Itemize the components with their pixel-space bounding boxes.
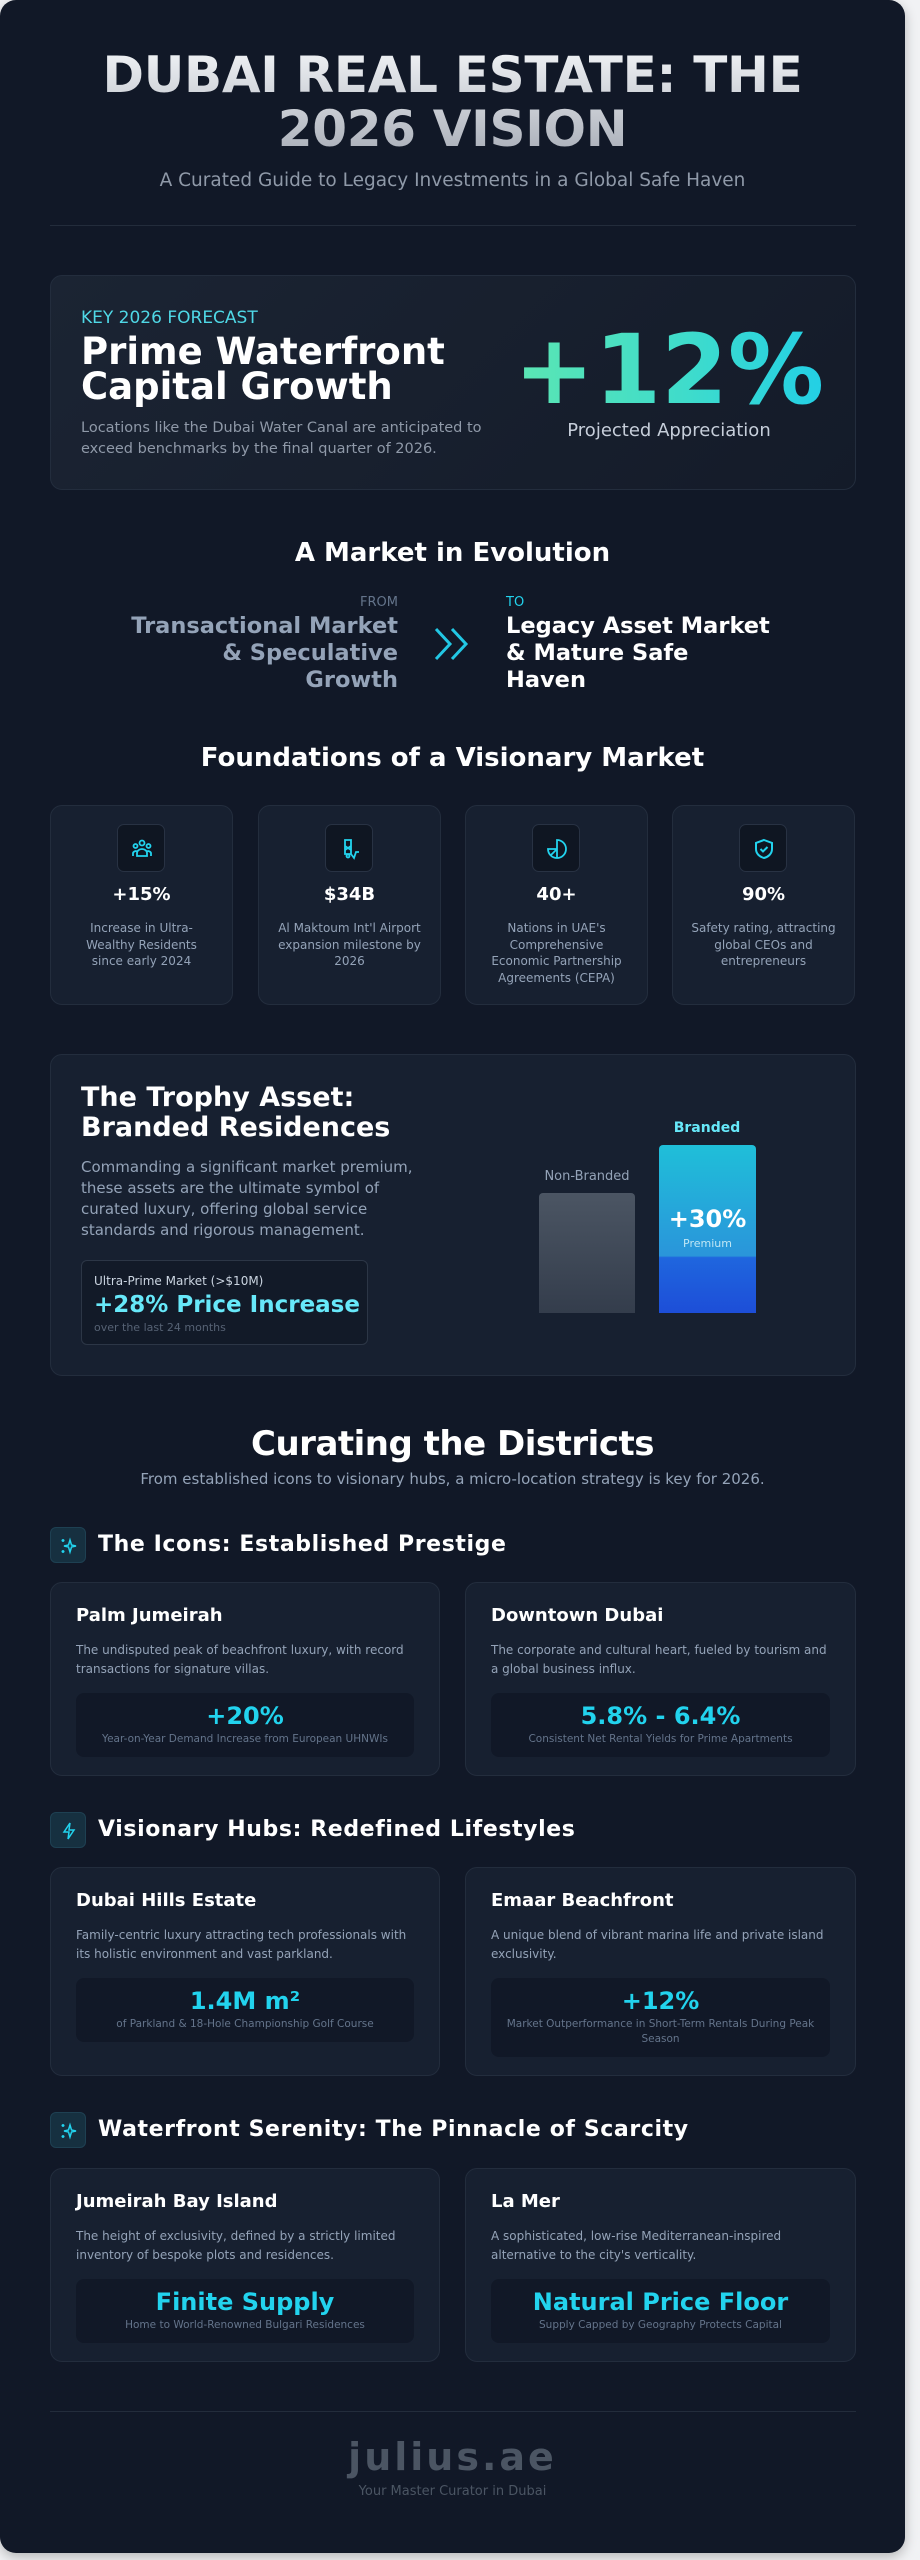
section heading: icons: [50, 1527, 507, 1563]
card: dubai hills: [50, 1867, 440, 2076]
bar chart: Premium: [683, 1237, 732, 1250]
stat card 4: 90%: [742, 884, 785, 905]
bar chart: Non-Branded: [544, 1169, 630, 1184]
from block: [131, 595, 398, 693]
card: palm jumeirah: [50, 1582, 440, 1776]
card: jumeirah bay: Home to World-Renowned Bulgari Residences: [125, 2319, 365, 2331]
card: la mer: A sophisticated, low-rise Mediterranean-inspired alternative to the city's verticality.: [491, 2229, 781, 2262]
description: Locations like the Dubai Water Canal are anticipated to exceed benchmarks by the final quarter of 2026.: [81, 420, 482, 457]
stat card 1: [50, 805, 233, 1005]
subtitle: A Curated Guide to Legacy Investments in a Global Safe Haven: [160, 170, 745, 191]
card: la mer: La Mer: [491, 2191, 560, 2212]
to block: & Mature Safe: [506, 640, 688, 666]
card: dubai hills: 1.4M m²: [190, 1987, 300, 2015]
stat card 2: [258, 805, 441, 1005]
card: jumeirah bay: The height of exclusivity, defined by a strictly limited inventory of bespoke plots and residences.: [76, 2229, 396, 2262]
card: downtown: The corporate and cultural heart, fueled by tourism and a global business influx.: [491, 1643, 827, 1676]
card: downtown: Downtown Dubai: [491, 1605, 663, 1626]
title: DUBAI REAL ESTATE: THE: [103, 46, 802, 104]
main card: Waterfront Serenity: The Pinnacle of Scarcity: [98, 2117, 689, 2142]
card: la mer: Natural Price Floor: [533, 2288, 788, 2316]
big stat: +12%: [514, 314, 824, 426]
heading: Capital Growth: [81, 365, 393, 408]
footer tagline: Your Master Curator in Dubai: [359, 2484, 546, 2499]
card: emaar beachfront: +12%: [622, 1987, 699, 2015]
heading: foundations: Foundations of a Visionary Market: [201, 743, 704, 773]
from block: FROM: [360, 595, 398, 610]
section heading: visionary hubs: [50, 1812, 575, 1848]
heading: [81, 1082, 390, 1143]
card: downtown: [465, 1582, 856, 1776]
section heading: waterfront: [50, 2112, 689, 2148]
heading: The Trophy Asset:: [81, 1082, 354, 1113]
card: palm jumeirah: Year-on-Year Demand Increase from European UHNWIs: [102, 1733, 388, 1745]
card: jumeirah bay: Finite Supply: [156, 2288, 334, 2316]
icon: people: [117, 824, 165, 872]
panel: key forecast: [50, 275, 856, 490]
stat card 3: Nations in UAE's Comprehensive Economic Partnership Agreements (CEPA): [491, 921, 622, 984]
callout: [81, 1260, 368, 1345]
to block: Legacy Asset Market: [506, 613, 770, 639]
footer brand: julius.ae: [348, 2435, 557, 2479]
card: la mer: Supply Capped by Geography Protects Capital: [539, 2319, 782, 2331]
card: emaar beachfront: Emaar Beachfront: [491, 1890, 674, 1911]
card: downtown: Consistent Net Rental Yields for Prime Apartments: [528, 1733, 793, 1745]
icon: pie: [532, 824, 580, 872]
stat card 3: 40+: [536, 884, 577, 905]
callout: +28% Price Increase: [94, 1292, 360, 1318]
subtitle: curating: From established icons to visionary hubs, a micro-location strategy is key for 2026.: [140, 1470, 765, 1488]
title: [0, 48, 905, 156]
heading: [81, 330, 445, 408]
bar chart: Branded: [674, 1120, 740, 1136]
to block: Haven: [506, 667, 586, 693]
heading: curating: Curating the Districts: [251, 1424, 654, 1464]
stat card 2: Al Maktoum Int'l Airport expansion milestone by 2026: [278, 921, 421, 968]
stat card 1: Increase in Ultra-Wealthy Residents since early 2024: [86, 921, 197, 968]
icon: shield: [739, 824, 787, 872]
card: palm jumeirah: Palm Jumeirah: [76, 1605, 223, 1626]
card: jumeirah bay: [50, 2168, 440, 2362]
from block: Growth: [305, 667, 398, 693]
card: dubai hills: Family-centric luxury attracting tech professionals with its holistic environment and vast parkland.: [76, 1928, 406, 1960]
to block: TO: [506, 595, 524, 610]
stat card 3: [465, 805, 648, 1005]
main card: The Icons: Established Prestige: [98, 1532, 507, 1557]
stat card 4: Safety rating, attracting global CEOs and entrepreneurs: [691, 921, 836, 968]
to block: [506, 595, 770, 693]
card: dubai hills: of Parkland & 18-Hole Championship Golf Course: [116, 2018, 374, 2030]
description: Commanding a significant market premium, these assets are the ultimate symbol of curated luxury, offering global service standards and rigorous management.: [81, 1158, 412, 1239]
card: jumeirah bay: Jumeirah Bay Island: [76, 2191, 278, 2212]
card: emaar beachfront: A unique blend of vibrant marina life and private island exclusivity.: [491, 1928, 824, 1960]
callout: Ultra-Prime Market (>$10M): [94, 1274, 263, 1288]
from block: Transactional Market: [131, 613, 398, 639]
stat card 1: +15%: [112, 884, 171, 905]
bar chart: +30%: [669, 1205, 746, 1233]
panel: trophy asset: [50, 1054, 856, 1376]
card: palm jumeirah: The undisputed peak of beachfront luxury, with record transactions for signature villas.: [76, 1643, 404, 1676]
card: dubai hills: Dubai Hills Estate: [76, 1890, 256, 1911]
card: emaar beachfront: [465, 1867, 856, 2076]
label: KEY 2026 FORECAST: [81, 308, 258, 328]
from block: & Speculative: [222, 640, 398, 666]
heading: Branded Residences: [81, 1112, 390, 1143]
main card: Visionary Hubs: Redefined Lifestyles: [98, 1817, 575, 1842]
arrow: chevrons: [435, 628, 468, 660]
card: emaar beachfront: Market Outperformance in Short-Term Rentals During Peak Season: [507, 2018, 814, 2045]
callout: over the last 24 months: [94, 1321, 226, 1334]
bar chart: [539, 1120, 756, 1313]
stat caption: Projected Appreciation: [567, 420, 771, 441]
stat card 4: [672, 805, 855, 1005]
heading: evolution: A Market in Evolution: [295, 538, 610, 568]
stat card 2: $34B: [324, 884, 375, 905]
title: 2026 VISION: [278, 100, 627, 158]
card: palm jumeirah: +20%: [206, 1702, 284, 1730]
card: downtown: 5.8% - 6.4%: [581, 1702, 740, 1730]
icon: plane: [325, 824, 373, 872]
card: la mer: [465, 2168, 856, 2362]
heading: Prime Waterfront: [81, 330, 445, 373]
